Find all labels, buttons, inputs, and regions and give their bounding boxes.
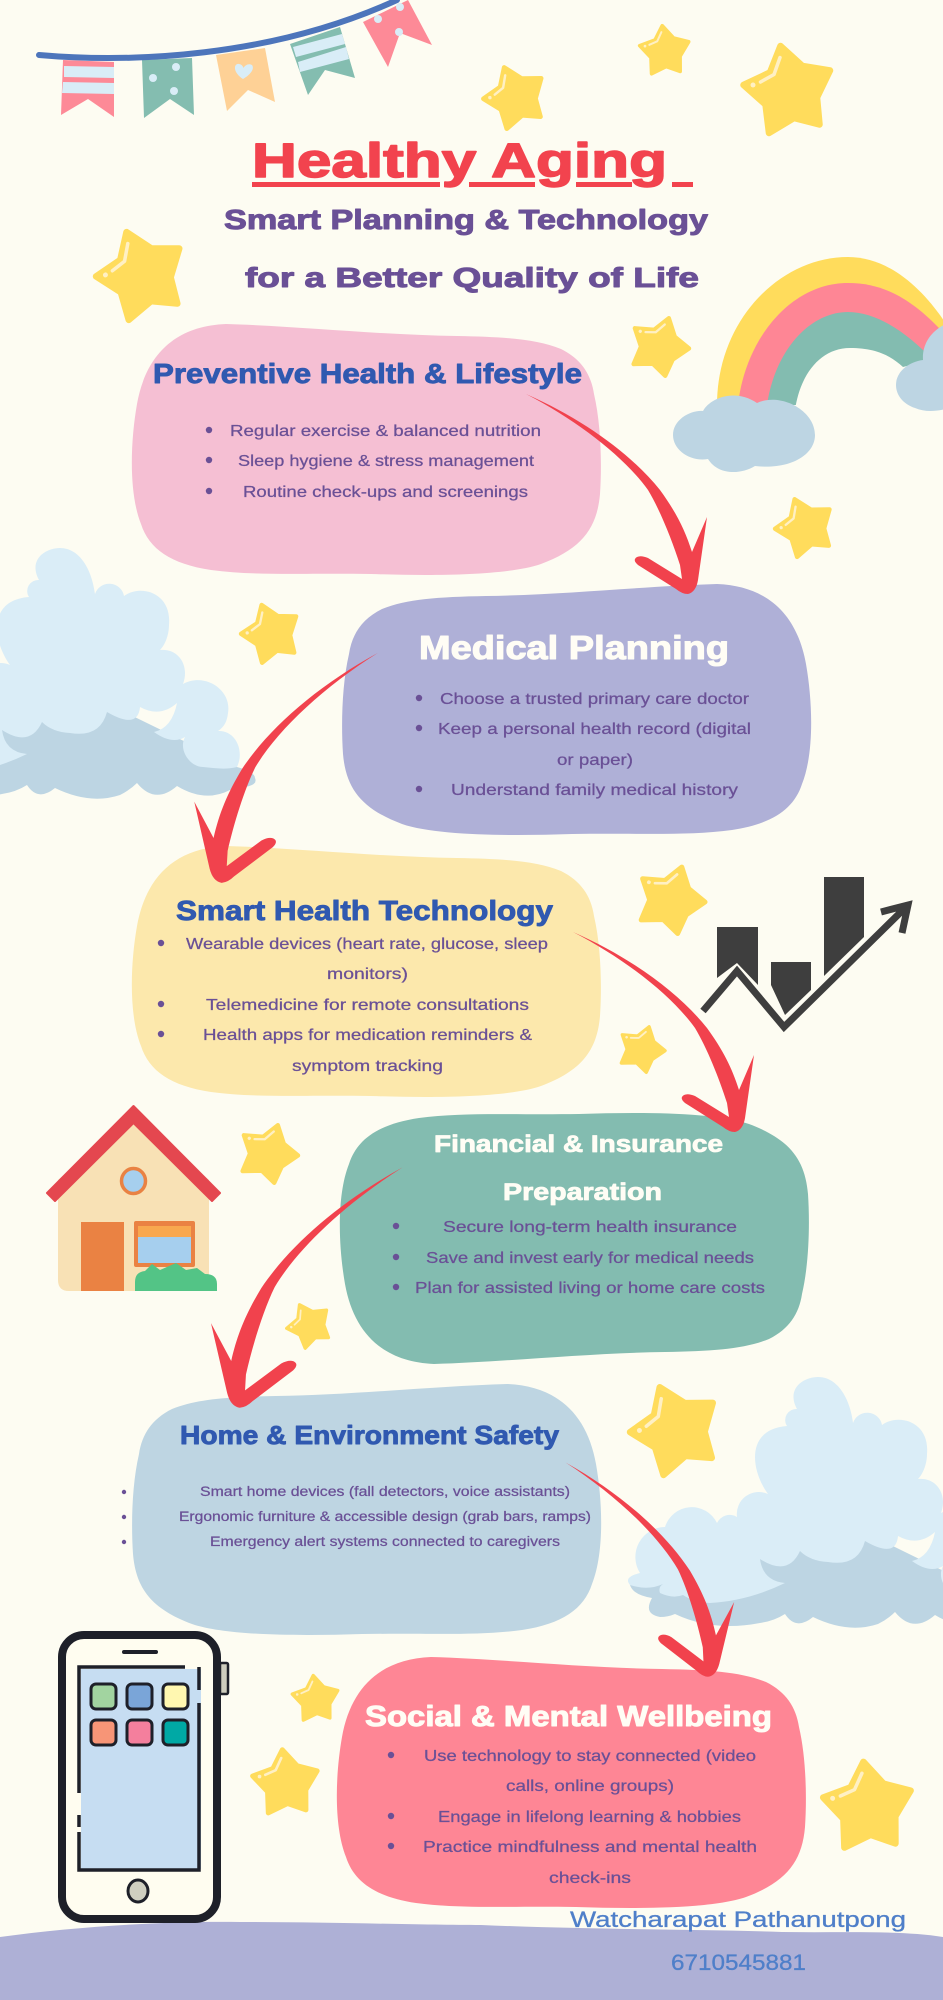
arrow: preventive to medical	[526, 394, 707, 594]
panel 4 bullets: Secure long-term health insurance	[443, 1219, 737, 1236]
panel 5 heading: Home & Environment Safety	[180, 1420, 560, 1450]
panel: financial and insurance	[340, 1113, 809, 1364]
arrow: home to social	[547, 1462, 746, 1679]
panel 6 bullets: check-ins	[549, 1870, 631, 1887]
panel 1 bullets: Sleep hygiene & stress management	[238, 453, 535, 470]
subtitle: Smart Planning & Technology	[224, 204, 709, 235]
bunting	[39, 0, 432, 118]
panel 3 heading: Smart Health Technology	[176, 895, 553, 926]
arrow: financial to home	[199, 1167, 422, 1410]
panel 1 bullets: Regular exercise & balanced nutrition	[230, 423, 541, 440]
panel 1 bullets: Routine check-ups and screenings	[243, 484, 528, 501]
panel 4 heading: Preparation	[503, 1179, 662, 1206]
panel 4 bullets: Plan for assisted living or home care costs	[415, 1280, 765, 1297]
author name and id: Watcharapat Pathanutpong	[570, 1907, 906, 1932]
panel 4 bullets: Save and invest early for medical needs	[426, 1250, 754, 1267]
subtitle	[224, 204, 709, 293]
panel 4 shape	[340, 1113, 809, 1364]
panel: medical planning	[342, 584, 811, 835]
panel 5 shape	[132, 1384, 601, 1635]
arrow: smart health to financial	[573, 932, 754, 1132]
panel 2 bullets: Choose a trusted primary care doctor	[440, 691, 750, 708]
icon: house	[47, 1106, 220, 1291]
panel 4 heading: Financial & Insurance	[434, 1131, 723, 1158]
panel 2 bullets: Keep a personal health record (digital	[438, 721, 751, 738]
panel 2 shape	[342, 584, 811, 835]
arrow: medical to smart health	[183, 653, 396, 885]
title: Healthy Aging	[252, 135, 667, 188]
panel 2 bullets	[416, 691, 751, 799]
panel 1 shape	[132, 324, 601, 575]
icon: smartphone	[62, 1635, 228, 1919]
panel 5 bullets: Ergonomic furniture & accessible design (grab bars, ramps)	[179, 1509, 591, 1524]
subtitle: for a Better Quality of Life	[245, 262, 699, 293]
bottom purple hill	[0, 1922, 943, 2000]
panel 5 bullets: Emergency alert systems connected to caregivers	[210, 1534, 560, 1549]
large cloud left	[0, 548, 256, 799]
panel 6 bullets: Engage in lifelong learning & hobbies	[438, 1809, 741, 1826]
panel 3 bullets	[158, 936, 548, 1075]
rainbow with clouds	[673, 257, 943, 472]
stars	[90, 24, 913, 1853]
panel 3 bullets: monitors)	[327, 966, 408, 983]
panel 6 bullets: calls, online groups)	[506, 1778, 674, 1795]
panel 6 bullets: Use technology to stay connected (video	[424, 1748, 756, 1765]
panel 3 bullets: Telemedicine for remote consultations	[206, 997, 529, 1014]
panel 5 bullets	[122, 1484, 591, 1549]
panel 2 bullets: Understand family medical history	[451, 782, 738, 799]
panel 6 bullets	[388, 1748, 757, 1887]
panel: preventive health	[132, 324, 601, 575]
panel 1 heading: Preventive Health & Lifestyle	[153, 358, 582, 389]
panel 4 bullets	[393, 1219, 765, 1297]
panel 4 heading	[434, 1131, 723, 1206]
icon: growth chart	[703, 877, 908, 1027]
panel: home and environment safety	[122, 1384, 601, 1635]
panel: social and mental wellbeing	[337, 1657, 806, 1908]
panel 6 heading: Social & Mental Wellbeing	[365, 1701, 772, 1733]
panel 6 bullets: Practice mindfulness and mental health	[423, 1839, 757, 1856]
author name and id: 6710545881	[671, 1950, 806, 1975]
panel 2 heading: Medical Planning	[419, 629, 729, 666]
author name and id	[570, 1907, 906, 1975]
panel 3 shape	[132, 846, 601, 1097]
panel 3 bullets: Wearable devices (heart rate, glucose, sleep	[186, 936, 548, 953]
large cloud right	[628, 1377, 943, 1628]
panel 5 bullets: Smart home devices (fall detectors, voice assistants)	[200, 1484, 570, 1499]
panel 6 shape	[337, 1657, 806, 1908]
panel: smart health technology	[132, 846, 601, 1097]
panel 3 bullets: Health apps for medication reminders &	[203, 1027, 532, 1044]
panel 1 bullets	[206, 423, 541, 501]
panel 2 bullets: or paper)	[557, 752, 633, 769]
panel 3 bullets: symptom tracking	[292, 1058, 443, 1075]
